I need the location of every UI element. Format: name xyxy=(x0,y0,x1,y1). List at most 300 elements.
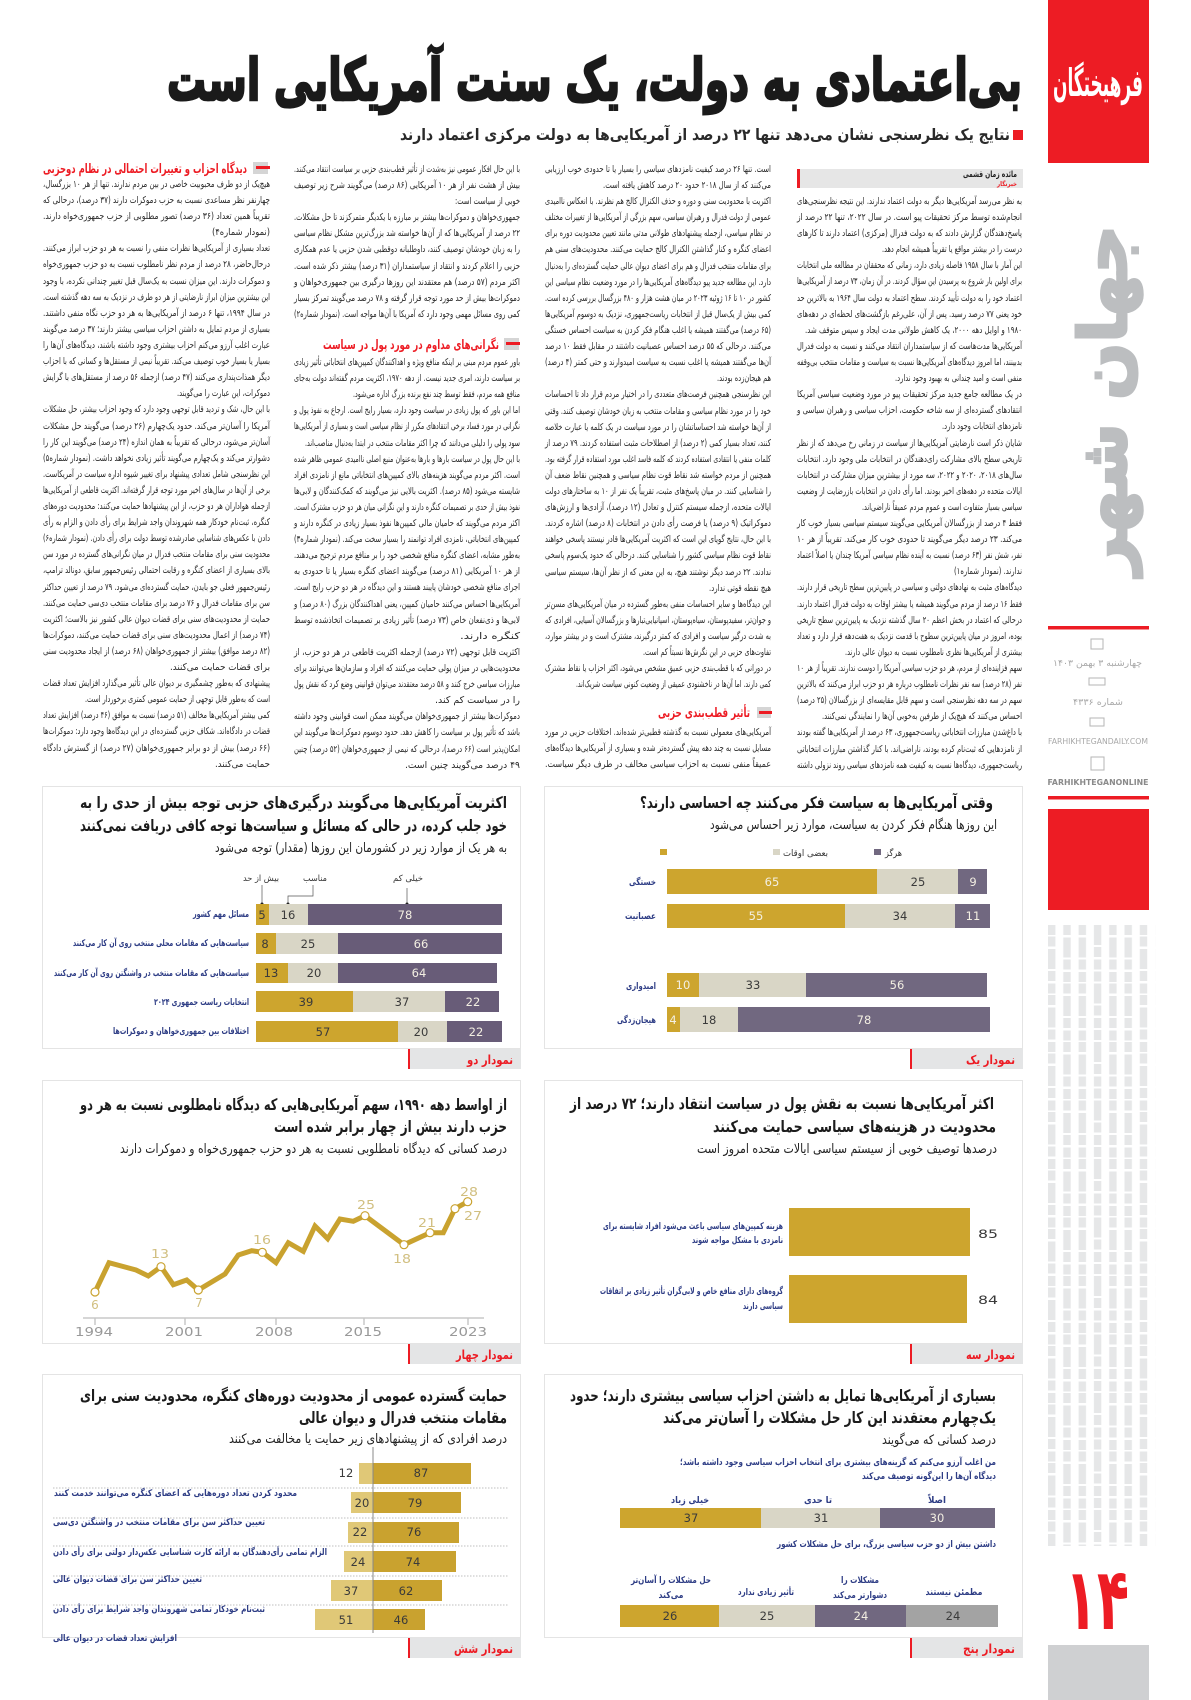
article column 3: دموکرات‌ها بیشتر از جمهوری‌خواهان می‌گویند ممکن است قوانینی وجود داشته xyxy=(294,710,520,722)
chart 1 row labels: امیدواری xyxy=(626,981,656,992)
article column 3: بر سیاست دارند، امری جدید نیست. از دهه ۱۹۷۰، اکثریت مردم گفته‌اند دولت به‌جای xyxy=(294,372,520,384)
chart 1 subtitle: این روزها هنگام فکر کردن به سیاست، موارد زیر احساس می‌شود xyxy=(710,817,997,833)
chart 6 row labels xyxy=(53,1487,327,1644)
article column 3: کمی روی مسائل مهمی وجود دارد که آمریکا با آن‌ها مواجه است. (نمودار شماره۲) xyxy=(294,308,520,320)
article column 1: بوده، امروز در میان پایین‌ترین سطوح با قدمت نزدیک به هفت‌دهه قرار دارد و تعداد xyxy=(797,631,1022,642)
chart 2 bars: 13 xyxy=(264,966,278,980)
byline: خبرنگار xyxy=(996,180,1017,188)
chart 1 bars: 10 xyxy=(676,978,690,992)
chart 5 upper bar: اصلاً xyxy=(928,1494,946,1506)
article column 1: آمریکایی‌ها مدت‌هاست که از سیاستمداران انتقاد می‌کنند و نسبت به دولت فدرال xyxy=(797,340,1022,352)
line chart: 2008 xyxy=(255,1325,293,1339)
article column 4: رئیس‌جمهور فعلی جو بایدن، حمایت گسترده‌ای می‌شود. ۷۹ درصد از تعیین حداکثر xyxy=(42,581,270,593)
article column 4: تقریباً همین تعداد (۳۶ درصد) تصور مطلوبی از حزب جمهوری‌خواه دارند. xyxy=(43,209,270,222)
page number: ۱۴ xyxy=(1065,1550,1129,1650)
article column 2: اکثریت با محدودیت سنی و دوره و حذف الکترال کالج هم نظرند. با انعکاس ناامیدی xyxy=(545,196,771,207)
article column 1: انجام‌شده توسط مرکز تحقیقات پیو است. در سال ۲۰۲۲، تنها ۲۲ درصد از xyxy=(796,212,1022,223)
chart 5 upper bar: 30 xyxy=(930,1511,944,1525)
chart 3 row labels: گروه‌های دارای منافع خاص و لابی‌گران تأثیر زیادی بر اتفاقات xyxy=(600,1285,783,1297)
line chart: 6 xyxy=(91,1298,99,1312)
chart 5 lower bar: 26 xyxy=(663,1609,677,1623)
article column 2: می‌کنند. درحالی که ۵۵ درصد احساس عصبانیت داشتند در مقابل فقط ۱۰ درصد xyxy=(545,341,771,352)
chart 3 row labels xyxy=(600,1221,783,1312)
chart 2 row labels: مسائل مهم کشور xyxy=(192,909,249,920)
chart 5 lower bar: تأثیر زیادی ندارد xyxy=(738,1586,794,1598)
chart 2 bars: 8 xyxy=(261,937,269,951)
chart 4 title xyxy=(79,1094,507,1137)
article column 3: با این حال پول در سیاست بارها و بارها به‌عنوان منبع اصلی ناامیدی عمومی ظاهر شده xyxy=(294,454,520,465)
chart 5 upper bar: 31 xyxy=(814,1511,828,1525)
tab: chart 4 xyxy=(408,1344,521,1364)
chart 5 lower bar xyxy=(620,1574,998,1627)
article column 1: درحالی که اعتماد در بخش اعظم ۲۰ سال گذشته نزدیک به پایین‌ترین سطح تاریخی xyxy=(797,614,1022,626)
chart 5 title: بسیاری از آمریکایی‌ها تمایل به داشتن احزاب سیاسی بیشتری دارند؛ حدود xyxy=(570,1385,996,1405)
heading: دیدگاه احزاب: دیدگاه احزاب و تغییرات احتمالی در نظام دوحزبی xyxy=(43,161,247,177)
diverging bars: 76 xyxy=(407,1525,421,1539)
article column 3: ۲۲ درصد از آمریکایی‌ها که از آن‌ها خواسته شد بزرگ‌ترین مشکل نظام سیاسی xyxy=(294,226,520,239)
article column 4: با این حال، شک و تردید قابل توجهی وجود دارد که وجود احزاب بیشتر، حل مشکلات xyxy=(43,404,270,415)
chart 5 upper bar: 37 xyxy=(684,1511,698,1525)
article column 3: کمپین‌های انتخاباتی، نامزدی افراد توانمند را بسیار سخت می‌کند. (نمودار شماره۳) xyxy=(294,534,520,545)
chart 1 title: وقتی آمریکایی‌ها به سیاست فکر می‌کنند چه احساسی دارند؟ xyxy=(640,792,993,813)
article column 4: دادن با عکس‌های شناسایی صادرشده توسط دولت برای رأی دادن. (نمودار شماره۶) xyxy=(43,531,270,544)
chart 2 row labels: اختلافات بین جمهوری‌خواهان و دموکرات‌ها xyxy=(113,1026,249,1037)
article column 1: انتقادهای گسترده‌ای از سه شاخه حکومت، احزاب سیاسی و رهبران سیاسی و xyxy=(796,404,1022,416)
article column 2: عمیقاً منفی نسبت به احزاب سیاسی مخالف در طرف دیگر سیاست. xyxy=(545,757,771,770)
issue info: شماره ۴۳۳۶ xyxy=(1073,698,1123,708)
article column 2: است. تنها ۲۶ درصد کیفیت نامزدهای سیاسی را بسیار یا تا حدودی خوب ارزیابی xyxy=(545,164,771,175)
chart 5 lower bar: حل مشکلات را آسان‌تر xyxy=(630,1574,711,1586)
heading: دیدگاه احزاب xyxy=(43,161,270,177)
article column 1: این آمار با سال ۱۹۵۸ فاصله زیادی دارد، زمانی که محققان در مطالعه ملی انتخابات xyxy=(797,259,1022,271)
article column 4: محدودیت سنی برای مقامات منتخب فدرال در میان نگرانی‌های گسترده در مورد سن xyxy=(43,548,270,560)
chart 1 row labels: خستگی xyxy=(629,876,656,888)
tab: chart 3 xyxy=(910,1344,1023,1364)
chart 5 lower bar: دشوارتر می‌کند xyxy=(833,1590,887,1601)
article column 4: برای قضات حمایت می‌کنند. xyxy=(170,662,270,673)
article column 3: آمریکایی‌ها احساس می‌کنند حامیان کمپین، یعنی اهداکنندگان بزرگ (۸۰ درصد) و xyxy=(293,597,520,610)
chart 2 title: خود جلب کرده، در حالی که مسائل و سیاست‌ها توجه کافی دریافت نمی‌کنند xyxy=(80,816,507,835)
article column 2: کشور در ۱۰ تا ۱۶ ژوئیه ۲۰۲۳ در میان هشت هزار و ۴۸۰ بزرگسال بررسی کرده است. xyxy=(545,292,771,304)
article column 3: خوبی از سیاست است: xyxy=(455,196,520,207)
article column 2: اعضای کنگره و کنار گذاشتن الکترال کالج حمایت می‌کنند. محدودیت‌های سنی هم xyxy=(545,243,771,255)
article column 4: آسان‌تر می‌شود، درحالی که تقریباً به همان اندازه (۲۴ درصد) می‌گویند این کار را xyxy=(43,435,270,448)
chart 6 title xyxy=(80,1386,507,1427)
tab: chart 2: نمودار دو xyxy=(466,1052,513,1067)
article column 2: مسایل نسبت به چند دهه پیش گسترده‌تر شده و بسیاری از آمریکایی‌ها دیدگاه‌های xyxy=(545,742,771,754)
chart 5 title xyxy=(570,1385,996,1428)
article column 3: دموکرات‌ها بیش از حد مورد توجه قرار گرفته و ۷۸ درصد می‌گویند تمرکز بسیار xyxy=(293,292,520,304)
article column 1: درست را در بیشتر مواقع یا تقریباً همیشه انجام دهد. xyxy=(882,242,1022,255)
chart 2 row labels xyxy=(54,909,249,1037)
article column 1: منفی است و امید چندانی به بهبود وجود ندارد. xyxy=(895,373,1022,384)
chart 1 bars: 33 xyxy=(746,978,760,992)
chart 2 bars: 66 xyxy=(414,937,428,951)
line chart: 2015 xyxy=(344,1325,382,1339)
article column 1: پاسخ‌دهندگان گزارش دادند که به دولت فدرال (مرکزی) اعتماد دارند تا کارهای xyxy=(797,227,1022,239)
chart 3 row labels: نامزدی با مشکل مواجه شوند xyxy=(692,1235,783,1246)
article column 3: باشد که تأثیر پول بر سیاست را کاهش دهد. حدود دوسوم دموکرات‌ها می‌گویند این xyxy=(294,725,520,738)
chart 5 upper bar: تا حدی xyxy=(804,1495,832,1506)
chart 1 bars xyxy=(667,869,990,1032)
article column 3: بیش از هشت نفر از هر ۱۰ آمریکایی (۸۶ درصد) می‌گویند شرح زیر توصیف xyxy=(294,179,520,191)
chart 2 bars: 25 xyxy=(301,937,315,951)
panel: chart 3 xyxy=(544,1080,1022,1344)
line chart: 27 xyxy=(464,1209,482,1223)
article column 4: بسیاری از مردم تمایل به داشتن احزاب سیاسی بیشتر دارند؛ ۳۷ درصد می‌گویند xyxy=(43,323,270,335)
newspaper logo block xyxy=(1048,0,1149,163)
tab: chart 5: نمودار پنج xyxy=(963,1641,1015,1656)
article column 4: سن برای مقامات فدرال و ۷۶ درصد برای مقامات منتخب دی‌سی حمایت می‌کنند. xyxy=(43,598,270,609)
article column 4: دیگر همذات‌پنداری می‌کنند (۴۷ درصد) ازجمله ۵۶ درصد از مستقل‌های با گرایش xyxy=(43,371,270,383)
article column 2: می‌کنند که از سال ۲۰۱۸ حدود ۲۰ درصد کاهش یافته است. xyxy=(603,180,771,191)
article column 3: جمهوری‌خواهان و دموکرات‌ها بیشتر بر مبارزه با یکدیگر متمرکزند تا حل مشکلات. xyxy=(294,211,520,223)
line chart: 16 xyxy=(253,1233,271,1247)
article column 2: هیچ نقطه قوتی ندارد. xyxy=(709,583,771,594)
chart 1 bars: 9 xyxy=(969,875,977,889)
article column 3: نگرانی در مورد فساد برخی انتقادهای مکرر از نظام سیاسی است و بسیاری از آمریکایی‌ها xyxy=(294,420,520,432)
chart 3 row labels: سیاسی دارند xyxy=(743,1301,783,1312)
article column 2: هم هیجان‌زده بودند. xyxy=(717,373,771,384)
article column 4: حمایت از محدودیت‌های سنی برای قضات دیوان عالی کشور نیز بالاست؛ اکثریت xyxy=(43,614,270,625)
chart 5 lower bar: می‌کند xyxy=(658,1590,684,1601)
tab: chart 6 xyxy=(408,1638,521,1658)
chart 5 lower bar: 24 xyxy=(854,1609,868,1623)
chart 1 bars: 78 xyxy=(857,1013,871,1027)
line chart: 2001 xyxy=(165,1325,203,1339)
article column 2: این نظرسنجی همچنین فرصت‌های متعددی را در اختیار مردم قرار داد تا احساسات xyxy=(545,389,771,400)
diverging bars xyxy=(53,1447,508,1633)
article column 1: با داغ‌شدن مبارزات انتخاباتی ریاست‌جمهوری، ۶۳ درصد از آمریکایی‌ها گفته بودند xyxy=(797,726,1022,738)
chart 3 title xyxy=(569,1093,996,1136)
article column 2: در دورانی که با قطب‌بندی حزبی عمیق مشخص می‌شود، اکثر احزاب یا نقاط مشترک xyxy=(545,663,771,674)
article column 4: هیچ‌یک از دو طرف محبوبیت خاصی در بین مردم ندارند. تنها از هر ۱۰ بزرگسال، xyxy=(43,178,270,190)
article column 1: سال‌های ۲۰۱۸، ۲۰۲۰ و ۲۰۲۲، سه مورد از بیشترین میزان مشارکت در انتخابات xyxy=(797,470,1022,481)
heading: نگرانی‌های مداوم در مورد پول در سیاست: نگرانی‌های مداوم در مورد پول در سیاست xyxy=(323,337,499,353)
chart 6 row labels: تعیین حداکثر سن برای مقامات منتخب در واشنگتن دی‌سی xyxy=(53,1516,265,1528)
chart 4 title: از اواسط دهه ۱۹۹۰، سهم آمریکایی‌هایی که دیدگاه نامطلوبی نسبت به هر دو xyxy=(79,1094,507,1114)
article column 4: ازجمله هواداران هر دو حزب، از این پیشنهادها حمایت می‌کنند: محدودیت دوره‌های xyxy=(43,501,270,512)
line chart: 18 xyxy=(393,1252,411,1266)
article column 3: اجرای منافع شخصی خودشان پایبند هستند و این دیدگاه در هر دو حزب رایج است. xyxy=(294,581,520,593)
article column 3: سود پولی را دلیلی می‌دانند که چرا اکثر مقامات منتخب در ابتدا به‌دنبال مناصب‌اند. xyxy=(305,438,520,449)
article column 4: کمی بیشتر آمریکایی‌ها مخالف (۵۱ درصد) نسبت به موافق (۴۶ درصد) افزایش تعداد xyxy=(43,709,270,721)
tab: chart 2 xyxy=(408,1049,521,1069)
article column 3: است. اکثر مردم می‌گویند هزینه‌های بالای کمپین‌های انتخاباتی مانع از نامزدی افراد xyxy=(294,469,520,481)
chart 1 legend: بعضی اوقات xyxy=(783,849,828,859)
article column 4 xyxy=(42,178,270,770)
diverging bars: 79 xyxy=(408,1496,422,1510)
article column 3: از هر ۱۰ آمریکایی (۸۱ درصد) می‌گویند اعضای کنگره بسیار یا تا حدودی به xyxy=(294,565,520,577)
article column 4: درحال‌حاضر، ۲۸ درصد از مردم نظر نامطلوب نسبت به دو حزب جمهوری‌خواه xyxy=(43,259,270,270)
chart 2 row labels: انتخابات ریاست جمهوری ۲۰۲۴ xyxy=(154,997,249,1008)
chart 1 bars: 25 xyxy=(911,875,925,889)
chart 1 bars: 11 xyxy=(966,909,980,923)
panel: chart 4 xyxy=(42,1080,520,1344)
chart 6 subtitle: درصد افرادی که از پیشنهادهای زیر حمایت یا مخالفت می‌کنند xyxy=(229,1432,507,1447)
article column 1: خود یعنی ۷۷ درصد رسید. پس از آن، علی‌رغم بازگشت‌های لحظه‌ای در دهه‌های xyxy=(797,308,1022,320)
article column 3: اما این باور که پول زیادی در سیاست وجود دارد، بسیار رایج است. ارجاع به نفوذ پول و xyxy=(293,405,520,416)
chart 2 bars: 5 xyxy=(258,908,266,922)
chart 2 callouts: خیلی کم xyxy=(393,874,423,884)
diverging bars: 12 xyxy=(339,1466,353,1480)
article column 1: به نظر می‌رسد آمریکایی‌ها دیگر به دولت اعتماد ندارند. این نتیجه نظرسنجی‌های xyxy=(797,195,1022,207)
article column 3: اکثریت قابل توجهی (۷۲ درصد) ازجمله اکثریت قاطعی در هر دو حزب، از xyxy=(293,647,520,658)
article column 1: احساس می‌کنند که هیچ‌یک از طرفین به‌خوبی آن‌ها را نمایندگی نمی‌کنند. xyxy=(822,710,1022,722)
chart 3 bars: 84 xyxy=(978,1293,998,1307)
article column 3: را در سیاست کم کند. xyxy=(435,695,520,706)
chart 2 bars: 37 xyxy=(395,995,409,1009)
tab: chart 5 xyxy=(910,1638,1023,1658)
article column 4: است که به‌طور قابل توجهی از حمایت عمومی کمتری برخوردار است. xyxy=(85,694,270,705)
panel: chart 2 xyxy=(42,786,520,1048)
article column 4: این نظرسنجی شامل تعدادی پیشنهاد برای تغییر شیوه اداره سیاست در آمریکاست. xyxy=(43,468,270,480)
article column 3 xyxy=(293,162,521,771)
chart 1 legend xyxy=(660,847,902,859)
chart 2 bars xyxy=(256,904,502,1042)
chart 6 title: مقامات منتخب فدرال و دیوان عالی xyxy=(299,1408,507,1427)
article column 3: مبارزات سیاسی خرج کنند و ۵۸ درصد معتقدند می‌توان قوانینی وضع کرد که نقش پول xyxy=(294,679,520,690)
article column 1: نفر، شش نفر (۶۳ درصد) نسبت به آینده نظام سیاسی آمریکا چندان یا اصلاً اعتماد xyxy=(797,549,1022,561)
chart 1 row labels xyxy=(617,876,656,1026)
chart 2 bars: 57 xyxy=(316,1025,330,1039)
article column 4: قضات در دادگاه‌اند. شکاف حزبی گسترده‌ای در این دیدگاه‌ها وجود دارد: دموکرات‌ها xyxy=(43,725,270,737)
article column 1: سهم در سه دهه نظرسنجی است و سهم قابل مقایسه‌ای از بزرگسالان (۲۵ درصد) xyxy=(797,694,1022,706)
chart 1 bars: 65 xyxy=(765,875,779,889)
chart 6 title: حمایت گسترده عمومی از محدودیت دوره‌های کنگره، محدودیت سنی برای xyxy=(80,1386,507,1405)
tab: chart 1: نمودار یک xyxy=(966,1052,1015,1067)
article column 4: برخی از آن‌ها در سال‌های اخیر مورد توجه قرار گرفته‌اند. اکثریت قاطعی از آمریکایی‌ها xyxy=(43,484,270,496)
article column 4: (نمودار شماره۴) xyxy=(212,227,270,238)
chart 5 subtitle: درصد کسانی که می‌گویند xyxy=(882,1432,996,1448)
red block xyxy=(1048,809,1149,910)
chart 1 bars: 56 xyxy=(890,978,904,992)
chart 1 bars: 18 xyxy=(702,1013,716,1027)
panel: chart 5 xyxy=(544,1374,1022,1638)
article column 2: تفاوت‌های حزبی در این نگرش‌ها نسبتاً کم است. xyxy=(643,645,771,658)
article column 1: سیاسی بسیار متفاوت است و عموم مردم عمیقاً ناراضی‌اند. xyxy=(862,500,1022,513)
chart 2 bars: 22 xyxy=(466,995,480,1009)
chart 5 title: یک‌چهارم معتقدند این کار حل مشکلات را آسان‌تر می‌کند xyxy=(663,1407,996,1428)
article column 4: این بیشترین میزان ابراز نارضایتی از هر دو طرف در نزدیک به سه دهه گذشته است. xyxy=(43,291,270,303)
chart 2 bars: 20 xyxy=(414,1025,428,1039)
chart 2 title xyxy=(80,792,507,835)
subtitle: نتایج یک نظرسنجی نشان می‌دهد تنها ۲۲ درصد از آمریکایی‌ها به دولت مرکزی اعتماد دارند xyxy=(400,124,1010,144)
issue info xyxy=(1048,626,1149,800)
article column 1: ندارند. (نمودار شماره۱) xyxy=(954,566,1022,577)
article column 2: با این حال، نتایج گویای این است که اکثریت آمریکایی‌ها قادر نیستند پاسخی خواهند xyxy=(545,533,771,545)
article column 4: دموکرات، این عبارت را می‌گویند. xyxy=(177,387,270,399)
chart 1 bars: 55 xyxy=(749,909,763,923)
article column 2: در نظام سیاسی، ازجمله پیشنهادهای طولانی مدتی مانند تعیین محدودیت دوره برای xyxy=(545,228,771,239)
chart 6 row labels: تعیین حداکثر سن برای قضات دیوان عالی xyxy=(53,1574,202,1585)
article column 2: همچنین از مردم خواسته شد نقاط قوت نظام سیاسی و همچنین نقاط ضعف آن xyxy=(545,469,771,481)
chart 6 row labels: محدود کردن تعداد دوره‌هایی که اعضای کنگره می‌توانند خدمت کنند xyxy=(54,1487,297,1499)
diverging bars: 74 xyxy=(406,1555,420,1569)
article column 3: به‌طور مشابه، اعضای کنگره منافع شخصی خود را بر منافع مردم ترجیح می‌دهند. xyxy=(294,549,520,561)
sidebar xyxy=(1048,0,1149,1700)
article column 2: کنند، تعداد بسیار کمی (۲ درصد) از اصطلاحات مثبت استفاده کردند. ۷۹ درصد از xyxy=(544,438,771,449)
article column 2: آن‌ها می‌گفتند همیشه یا اغلب نسبت به سیاست امیدوارند و حتی کمتر (۴ درصد) xyxy=(545,356,771,368)
article column 3: اکثر مردم (۵۷ درصد) هم معتقدند این روزها درگیری بین جمهوری‌خواهان و xyxy=(293,276,520,288)
chart 2 bars: 22 xyxy=(469,1025,483,1039)
line chart: 25 xyxy=(357,1198,375,1212)
line chart: 2023 xyxy=(449,1325,487,1339)
article column 3: لابی‌ها و ذی‌نفعان خاص (۷۳ درصد) تأثیر زیادی بر تصمیمات اتخاذشده توسط xyxy=(294,613,520,626)
byline: مائده زمان قشمی xyxy=(963,170,1017,180)
article column 4: چهارنفر نظر مساعدی نسبت به حزب دموکرات دارند (۳۷ درصد)، درحالی که xyxy=(43,195,270,206)
article column 4: کنگره، ثبت‌نام خودکار همه شهروندان واجد شرایط برای رأی دادن و الزام به رأی xyxy=(43,515,270,528)
article column 4: آمریکا را آسان‌تر می‌کند. حدود یک‌چهارم (۲۶ درصد) می‌گویند حل مشکلات xyxy=(43,420,270,432)
chart 1 bars: 34 xyxy=(893,909,907,923)
article column 4: بالای بسیاری از اعضای کنگره و رقابت احتمالی رئیس‌جمهور سابق، دونالد ترامپ، xyxy=(43,564,270,576)
chart 2 row labels: سیاست‌هایی که مقامات منتخب در واشنگتن روی آن کار می‌کنند xyxy=(54,967,249,979)
article column 1: بدبینند، اما امروز دیدگاه‌های آمریکایی‌ها نسبت به سیاست و مقامات منتخب بی‌وقفه xyxy=(797,356,1022,368)
chart 5 lower question: داشتن بیش از دو حزب سیاسی بزرگ، برای حل مشکلات کشور xyxy=(776,1538,996,1550)
diverging bars: 20 xyxy=(355,1496,369,1510)
article column 1: اعتماد خود را به دولت تأیید کردند. سطح اعتماد به دولت سال ۱۹۶۴ به بالاترین حد xyxy=(797,291,1022,304)
article column 3: با این حال افکار عمومی نیز به‌شدت از تأثیر قطب‌بندی حزبی بر سیاست انتقاد می‌کنند. xyxy=(294,162,520,175)
line chart: 7 xyxy=(195,1296,203,1310)
chart 6 row labels: ثبت‌نام خودکار تمامی شهروندان واجد شرایط برای رأی دادن xyxy=(53,1603,265,1615)
article column 2: کلمات منفی یا انتقادی استفاده کردند که کلمه فاسد اغلب مورد استفاده قرار گرفته بود. xyxy=(545,453,771,465)
article column 4: (۸۲ درصد موافق) بیشتر از جمهوری‌خواهان (۶۸ درصد) از ایجاد محدودیت سنی xyxy=(43,646,270,657)
chart 3 title: محدودیت در هزینه‌های سیاسی حمایت می‌کنند xyxy=(713,1117,996,1136)
diverging bars: 46 xyxy=(394,1613,408,1627)
line chart xyxy=(75,1185,487,1339)
article column 2: و جوان‌تر، سفیدپوستان، سیاه‌پوستان، اسپانیایی‌تبارها و بزرگسالان آسیایی، افرادی که xyxy=(545,614,771,626)
article column 2: خود را در مورد نظام سیاسی و مقامات منتخب به زبان خودشان توصیف کنند. وقتی xyxy=(545,406,771,417)
bottom grey block xyxy=(1048,1645,1149,1700)
tab: chart 1 xyxy=(910,1049,1023,1069)
article column 2: دموکراتیک (۹ درصد) یا فرصت رأی دادن در انتخابات (۸ درصد) اشاره کردند. xyxy=(545,516,771,529)
article column 3: کنگره دارند. xyxy=(460,630,521,642)
article column 4: (۶۶ درصد) بیش از دو برابر جمهوری‌خواهان (۲۷ درصد) از گسترش دادگاه xyxy=(43,742,270,754)
article column 2: ایالات متحده، ازجمله سیستم کنترل و تعادل (۱۲ درصد)، آزادی‌ها و ارزش‌های xyxy=(545,501,771,513)
article column 1: دیدگاه‌های مثبت به نهادهای دولتی و سیاسی در پایین‌ترین سطح تاریخی قرار دارند. xyxy=(797,581,1022,593)
diverging bars: 22 xyxy=(353,1525,367,1539)
diverging bars: 51 xyxy=(339,1613,353,1627)
article column 2: (۶۵ درصد) می‌گفتند همیشه یا اغلب هنگام فکر کردن به سیاست احساس خستگی xyxy=(545,324,771,336)
article column 4: (۷۴ درصد) از اعمال محدودیت‌های سنی برای قضات حمایت می‌کنند، دموکرات‌ها xyxy=(43,630,270,641)
chart 5 upper bar xyxy=(620,1494,995,1528)
article column 1: سهم فزاینده‌ای از مردم، هر دو حزب سیاسی آمریکا را دوست ندارند. تقریباً از هر ۱۰ xyxy=(797,661,1022,674)
chart 3 subtitle: درصدها توصیف خوبی از سیستم سیاسی ایالات متحده امروز است xyxy=(697,1142,997,1157)
article column 2: دارد. این مطالعه جدید پیو دیدگاه‌های آمریکایی‌ها را در مورد وضعیت نظام سیاسی این xyxy=(545,276,771,288)
article column 1: نامزدهای انتخابات وجود دارد. xyxy=(942,421,1022,432)
chart 5 upper question xyxy=(680,1456,996,1482)
issue info: چهارشنبه ۳ بهمن ۱۴۰۳ xyxy=(1053,659,1142,669)
chart 1 row labels: هیجان‌زدگی xyxy=(617,1014,656,1026)
article column 1: نفر (۲۸ درصد) سه نفر نظرات نامطلوب درباره هر دو حزب ابراز می‌کنند که بالاترین xyxy=(797,679,1022,690)
chart 2 bars: 78 xyxy=(398,908,412,922)
tab: chart 4: نمودار چهار xyxy=(455,1347,513,1362)
article column 4: عبارت اغلب آرزو می‌کنم احزاب بیشتری وجود داشته باشند، دیدگاه‌های آن‌ها را xyxy=(43,339,270,351)
article column 4: حمایت می‌کنند. xyxy=(215,759,270,770)
article column 4: در سال ۱۹۹۴، تنها ۶ درصد از آمریکایی‌ها به هر دو حزب نگاه منفی داشتند. xyxy=(43,307,270,319)
line chart: 1994 xyxy=(75,1325,113,1339)
article column 3: اکثر مردم می‌گویند که حامیان مالی کمپین‌ها نفوذ بسیار زیادی در کنگره دارند و xyxy=(293,517,520,529)
article column 4: پیشنهادی که به‌طور چشمگیری بر دیوان عالی تأثیر می‌گذارد افزایش تعداد قضات xyxy=(43,676,270,689)
chart 3 title: اکثر آمریکایی‌ها نسبت به نقش پول در سیاست انتقاد دارند؛ ۷۲ درصد از xyxy=(569,1093,994,1114)
article column 3: محدودیت‌هایی در میزان پولی حمایت می‌کنند که افراد و سازمان‌ها می‌توانند برای xyxy=(294,663,520,674)
chart 5 upper question: من اغلب آرزو می‌کنم که گزینه‌های بیشتری برای انتخاب احزاب سیاسی وجود داشته باشد؛ xyxy=(680,1456,996,1468)
diverging bars: 37 xyxy=(344,1584,358,1598)
article column 2 xyxy=(544,164,771,770)
article column 2: ندادند. ۲۲ درصد دیگر نوشتند هیچ، به این معنی که از نظر آن‌ها، سیستم سیاسی xyxy=(545,566,771,578)
panel: chart 6 xyxy=(42,1374,520,1644)
article column 1: ایالات متحده در دهه‌های اخیر بودند. اما رأی دادن در انتخابات بازرضایت از وضعیت xyxy=(797,484,1022,497)
issue info: FARHIKHTEGANDAILY.COM xyxy=(1048,737,1148,746)
article column 1: ۱۹۸۰ و اوایل دهه ۲۰۰۰، یک کاهش طولانی مدت ایجاد و سپس متوقف شد. xyxy=(805,325,1022,336)
article column 3: باور عموم مردم مبنی بر اینکه منافع ویژه و اهداکنندگان کمپین‌های انتخاباتی تأثیر زیادی xyxy=(294,355,520,368)
article column 2: آمریکایی‌های معمولی نسبت به گذشته قطبی‌تر شده‌اند. اختلافات حزبی در مورد xyxy=(545,726,771,738)
section name: جهان شهر: جهان شهر xyxy=(1065,225,1143,578)
chart 2 callouts: بیش از حد xyxy=(243,874,279,884)
article column 2: این دیدگاه‌ها و سایر احساسات منفی به‌طور گسترده در میان آمریکایی‌های مسن‌تر xyxy=(544,598,771,610)
article column 3: منافع همه مردم، فقط توسط چند نفع برنده بزرگ اداره می‌شود. xyxy=(353,387,520,400)
chart 5 lower bar: مشکلات را xyxy=(841,1575,879,1586)
article column 4: بسیار یا بسیار خوب توصیف می‌کند. تقریباً نیمی از مستقل‌ها و کسانی که با احزاب xyxy=(43,354,270,367)
article column 2: را شناسایی کنند. در میان پاسخ‌های مثبت، تقریباً یک نفر از ۱۰ به ساختارهای دولت xyxy=(545,484,771,497)
article column 4: تعداد بسیاری از آمریکایی‌ها نظرات منفی را نسبت به هر دو حزب ابراز می‌کنند. xyxy=(43,242,270,254)
article column 2: کمی دارند. اما آن‌ها در ناخشنودی عمیقی از وضعیت کنونی سیاست شریک‌اند. xyxy=(576,678,771,690)
article column 2: به شدت درگیر سیاست و افرادی که کمتر درگیرند، مشترک است و در بیشتر موارد، xyxy=(545,630,771,642)
article column 3: شایسته می‌شود (۸۵ درصد). اکثریت بالایی نیز می‌گویند که کمک‌کنندگان و لابی‌ها xyxy=(294,485,520,497)
line chart: 13 xyxy=(151,1247,169,1261)
chart 6 row labels: افزایش تعداد قضات در دیوان عالی xyxy=(53,1633,177,1644)
article column 1: فقط ۱۶ درصد از مردم می‌گویند همیشه یا بیشتر اوقات به دولت فدرال اعتماد دارند. xyxy=(797,598,1022,610)
chart 2 row labels: سیاست‌هایی که مقامات محلی منتخب روی آن کار می‌کنند xyxy=(73,937,249,949)
byline xyxy=(797,169,1023,188)
article column 1 xyxy=(796,195,1022,771)
chart 1 legend: هرگز xyxy=(884,847,902,859)
heading: تأثیر قطب‌بندی حزبی: تأثیر قطب‌بندی حزبی xyxy=(658,704,750,721)
chart 5 upper question: دیدگاه آن‌ها را این‌گونه توصیف می‌کند xyxy=(862,1470,996,1482)
chart 5 lower bar: مطمئن نیستند xyxy=(926,1587,983,1598)
article column 3: را به زبان خودشان توصیف کنند، داوطلبانه دوقطبی شدن حزبی یا عدم همکاری xyxy=(294,244,520,255)
chart 2 title: اکثریت آمریکایی‌ها می‌گویند درگیری‌های حزبی توجه بیش از حدی را به xyxy=(80,792,507,812)
chart 3 row labels: هزینه کمپین‌های سیاسی باعث می‌شود افراد شایسته برای xyxy=(603,1221,783,1232)
diverging bars: 87 xyxy=(414,1466,428,1480)
article column 3: ۴۹ درصد می‌گویند چنین است. xyxy=(405,759,520,771)
chart 2 callouts: مناسب xyxy=(303,874,327,884)
chart 3 bars xyxy=(789,1208,998,1323)
diverging bars: 62 xyxy=(399,1584,413,1598)
chart 6 row labels: الزام تمامی رأی‌دهندگان به ارائه کارت شناسایی عکس‌دار دولتی برای رأی دادن xyxy=(53,1546,327,1558)
article column 2: نقاط قوت نظام سیاسی کشور را شناسایی کنند. درحالی که حدود یک‌سوم پاسخی xyxy=(545,550,771,561)
chart 5 lower bar: 24 xyxy=(946,1609,960,1623)
tab: chart 3: نمودار سه xyxy=(966,1347,1015,1362)
chart 2 bars: 39 xyxy=(299,995,313,1009)
chart 4 subtitle: درصد کسانی که دیدگاه نامطلوبی نسبت به هر دو حزب جمهوری‌خواه و دموکرات دارند xyxy=(120,1141,507,1157)
article column 3: نفوذ بیش از حدی بر تصمیمات کنگره دارند و این نگرانی میان هر دو حزب مشترک است. xyxy=(294,501,520,513)
article column 2: از آن‌ها خواسته شد احساساتشان را در مورد سیاست در یک کلمه یا عبارت خلاصه xyxy=(545,421,771,433)
issue info: FARHIKHTEGANONLINE xyxy=(1048,778,1148,787)
article column 3: امکان‌پذیر است (۶۶ درصد)، درحالی که نیمی از جمهوری‌خواهان (۵۲ درصد) چنین xyxy=(294,744,520,755)
article column 1: می‌کند. ۲۳ درصد دیگر می‌گویند تا حدودی خوب کار می‌کند. تقریباً از هر ۱۰ xyxy=(797,532,1022,545)
chart 1 row labels: عصبانیت xyxy=(625,911,656,922)
chart 5 lower bar: 25 xyxy=(760,1609,774,1623)
chart 1 bars: 4 xyxy=(669,1013,677,1027)
article column 1: در یک مطالعه جامع جدید مرکز تحقیقات پیو در مورد وضعیت سیاسی آمریکا xyxy=(797,388,1022,400)
chart 4 title: حزب دارند بیش از چهار برابر شده است xyxy=(274,1117,507,1137)
chart 2 bars: 64 xyxy=(412,966,426,980)
chart 2 callouts xyxy=(243,874,423,906)
diverging bars: 24 xyxy=(351,1555,365,1569)
article column 3: حزبی را اعلام کردند و انتقاد از سیاستمداران (۳۱ درصد) بیشتر ذکر شده است. xyxy=(294,261,520,272)
article column 1: فقط ۴ درصد از بزرگسالان آمریکایی می‌گویند سیستم سیاسی بسیار خوب کار xyxy=(796,517,1022,529)
